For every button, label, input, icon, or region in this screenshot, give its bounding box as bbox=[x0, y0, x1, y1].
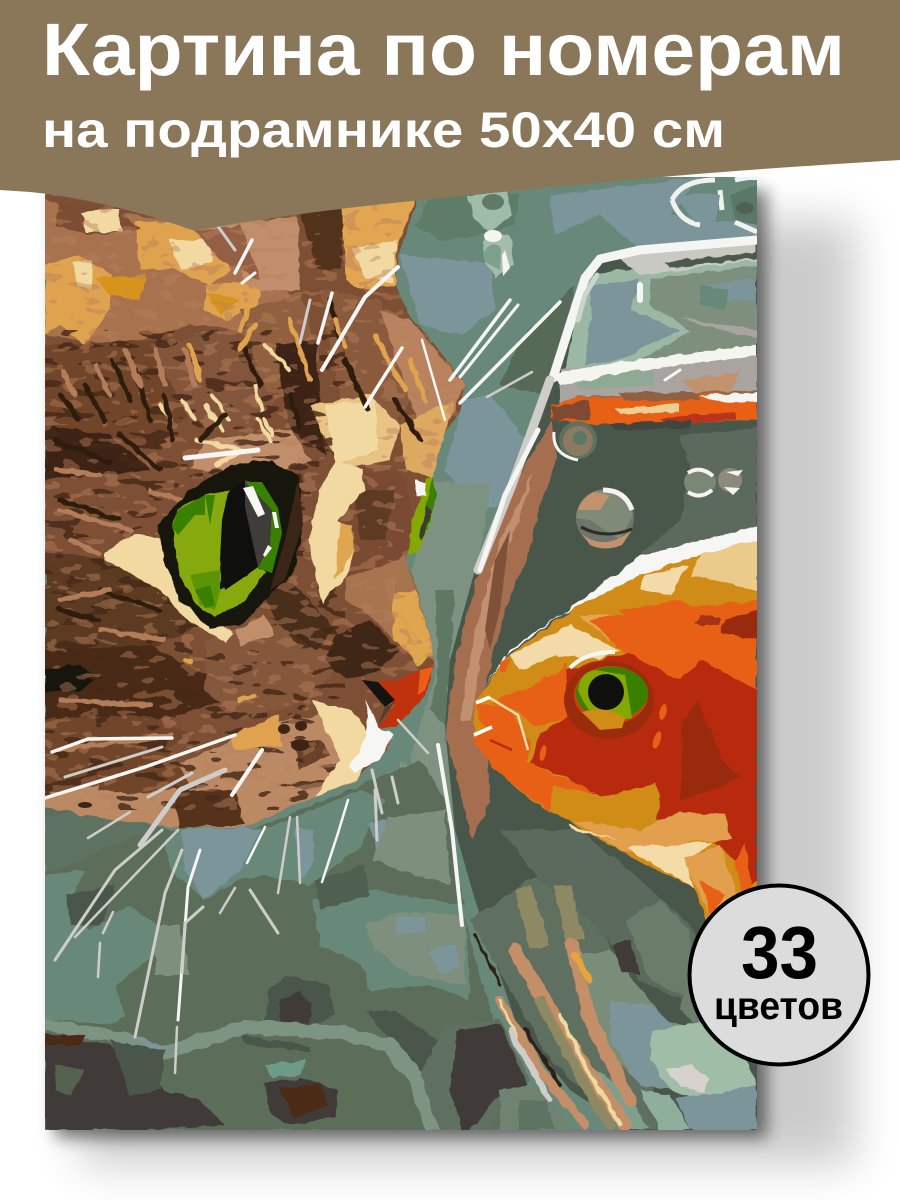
water line bbox=[553, 345, 757, 385]
head base bbox=[45, 190, 465, 827]
canvas shadow bbox=[55, 190, 855, 1165]
pupil bbox=[220, 482, 258, 590]
brown streaks at bowl base bbox=[475, 935, 630, 1125]
fur texture bbox=[45, 190, 465, 810]
cat head bbox=[45, 190, 465, 827]
bowl glass body bbox=[445, 237, 757, 1130]
cat far eye bbox=[408, 475, 436, 555]
bowl rim highlights bbox=[438, 240, 757, 925]
fish mouth bbox=[473, 658, 530, 767]
badge: 33 colours bbox=[690, 886, 868, 1064]
bubbles bbox=[482, 178, 757, 548]
fish markings bbox=[490, 540, 757, 925]
whiskers bbox=[45, 225, 560, 1073]
cream markings bbox=[105, 400, 378, 797]
goldfish bbox=[473, 526, 757, 925]
fish back highlight bbox=[483, 526, 757, 690]
fish body bbox=[473, 526, 757, 925]
fur strokes bbox=[55, 290, 425, 750]
stone surface bbox=[410, 1084, 411, 1085]
muzzle spots bbox=[78, 721, 309, 808]
dark wedge beside the glass bbox=[500, 285, 575, 395]
fish lower gold bbox=[566, 782, 660, 820]
subtitle: на подрамнике 50х40 см bbox=[42, 102, 725, 158]
table edge bbox=[45, 1018, 440, 1130]
bowl details bbox=[470, 240, 757, 1130]
fish eye bbox=[564, 652, 654, 739]
badge label: цветов bbox=[714, 985, 843, 1028]
orange water band bbox=[550, 392, 757, 430]
fur patches bbox=[45, 200, 465, 827]
fish red body bbox=[530, 650, 757, 880]
background water patches bbox=[45, 177, 757, 1130]
iris bbox=[172, 490, 265, 617]
top banner bbox=[0, 0, 900, 231]
brown tint band along the glass bbox=[445, 420, 558, 840]
fishbowl bbox=[438, 178, 757, 1130]
banner background bbox=[0, 0, 900, 231]
painting: cat and goldfish bbox=[45, 177, 757, 1130]
cat main eye bbox=[158, 460, 303, 628]
bottom stones bbox=[45, 1018, 530, 1130]
badge number: 33 bbox=[741, 911, 818, 994]
lower background bbox=[45, 760, 500, 1130]
cat nose bbox=[350, 667, 433, 772]
fish fin marks bbox=[538, 703, 668, 761]
title: Картина по номерам bbox=[42, 8, 845, 91]
